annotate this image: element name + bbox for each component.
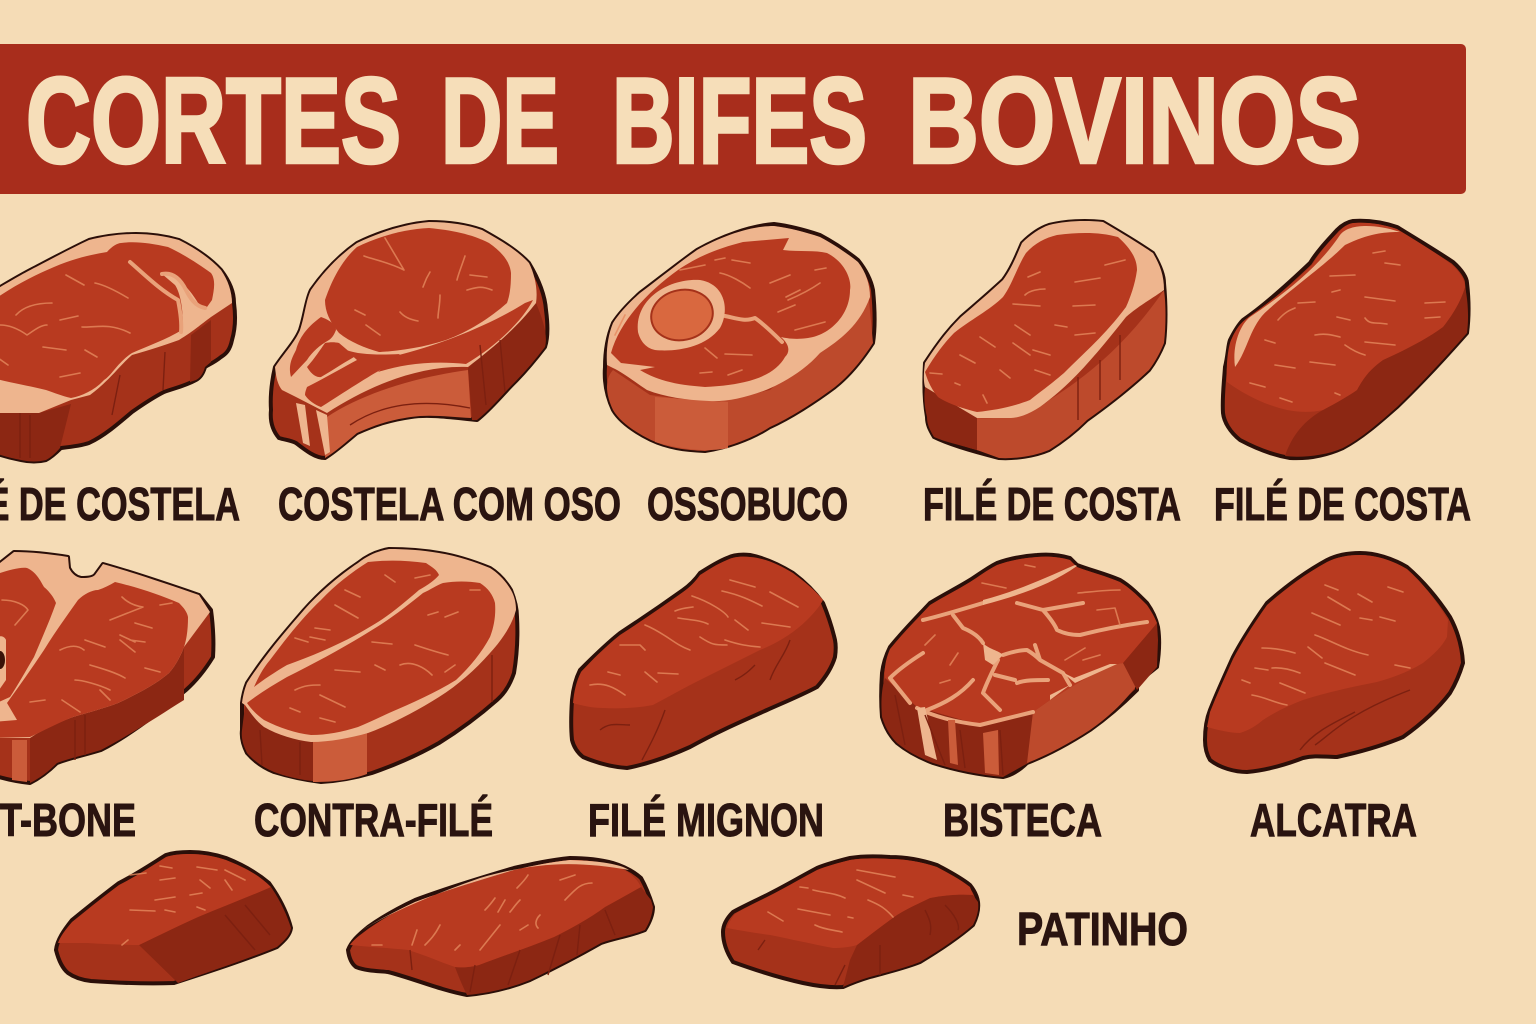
label: alcatra: ALCATRA — [1250, 794, 1417, 846]
steak: t-bone — [0, 552, 213, 783]
steak: costela com oso — [271, 222, 547, 458]
title: DE — [441, 52, 559, 188]
label: costela com oso: COSTELA COM OSO — [278, 478, 621, 530]
steak: bisteca — [881, 555, 1159, 777]
steak: bottom right — [723, 856, 978, 987]
label: file de costa: FILÉ DE COSTA — [923, 478, 1181, 530]
steak: ossobuco — [605, 224, 874, 451]
steak: bottom left — [56, 852, 291, 983]
title: BIFES — [612, 52, 867, 188]
steak: file mignon — [571, 555, 836, 768]
steak: contra-file — [242, 549, 517, 782]
steak: alcatra — [1205, 553, 1463, 772]
title — [26, 52, 1361, 188]
label: bisteca: BISTECA — [943, 794, 1102, 846]
label: patinho: PATINHO — [1017, 903, 1188, 955]
label: ossobuco: OSSOBUCO — [647, 478, 848, 530]
title banner — [0, 44, 1466, 194]
steak: bottom middle — [348, 858, 653, 995]
label: t-bone: T-BONE — [0, 794, 136, 846]
label: contra-file: CONTRA-FILÉ — [254, 794, 493, 846]
title: BOVINOS — [908, 52, 1361, 188]
steak: file de costa — [924, 221, 1166, 458]
title: CORTES — [26, 52, 401, 188]
icon: marrow bone — [646, 284, 718, 346]
steak: file de costa 2 — [1223, 221, 1468, 458]
label: file mignon: FILÉ MIGNON — [588, 794, 824, 846]
steak: file de costela — [0, 234, 235, 462]
